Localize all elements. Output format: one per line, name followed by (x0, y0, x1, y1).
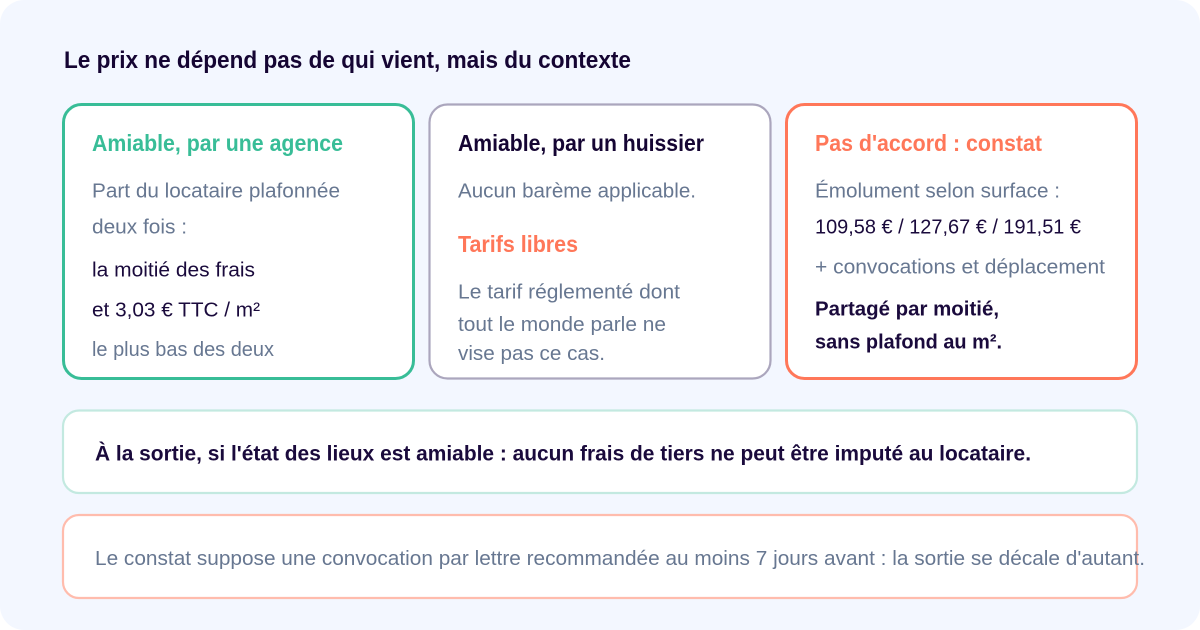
card text: surface fee: Émolument selon surface : (815, 180, 1060, 202)
callout: sortie amiable: À la sortie, si l'état des lieux est amiable : aucun frais de tiers ne peut être imputé au locataire. (95, 442, 1031, 466)
panel: amiable par un huissier (430, 104, 770, 378)
card heading: constat: Pas d'accord : constat (815, 130, 1042, 156)
card text: regulated rate: tout le monde parle ne (458, 313, 666, 336)
card text: plafond (92, 180, 340, 238)
card text: shared: sans plafond au m². (815, 332, 1002, 354)
card text: shared: Partagé par moitié, (815, 298, 999, 320)
callout: convocation (63, 515, 1145, 598)
card heading: huissier: Amiable, par un huissier (458, 130, 704, 156)
card text: no scale: Aucun barème applicable. (458, 180, 696, 202)
card text: shared (815, 298, 1002, 354)
card text: regulated rate (458, 280, 680, 365)
panel: amiable par une agence (64, 104, 414, 378)
card text: two caps: et 3,03 € TTC / m² (92, 298, 260, 322)
card heading: agence: Amiable, par une agence (92, 130, 343, 156)
card subheading: free rates: Tarifs libres (458, 231, 578, 257)
card text: plafond: Part du locataire plafonnée (92, 180, 340, 202)
card text: regulated rate: vise pas ce cas. (458, 342, 605, 365)
card text: regulated rate: Le tarif réglementé dont (458, 280, 680, 304)
callout: convocation: Le constat suppose une convocation par lettre recommandée au moins 7 jours avant : la sortie se décale d'autant. (95, 547, 1145, 570)
card text: plafond: deux fois : (92, 216, 187, 238)
card text: amounts: 109,58 € / 127,67 € / 191,51 € (815, 216, 1082, 238)
card text: extras: + convocations et déplacement (815, 256, 1105, 278)
title: Le prix ne dépend pas de qui vient, mais du contexte (64, 47, 631, 74)
panel: pas d'accord constat (786, 104, 1136, 378)
callout: sortie amiable (63, 410, 1137, 493)
card note: lowest: le plus bas des deux (92, 338, 275, 361)
card text: two caps: la moitié des frais (92, 258, 255, 282)
card text: two caps (92, 258, 260, 322)
